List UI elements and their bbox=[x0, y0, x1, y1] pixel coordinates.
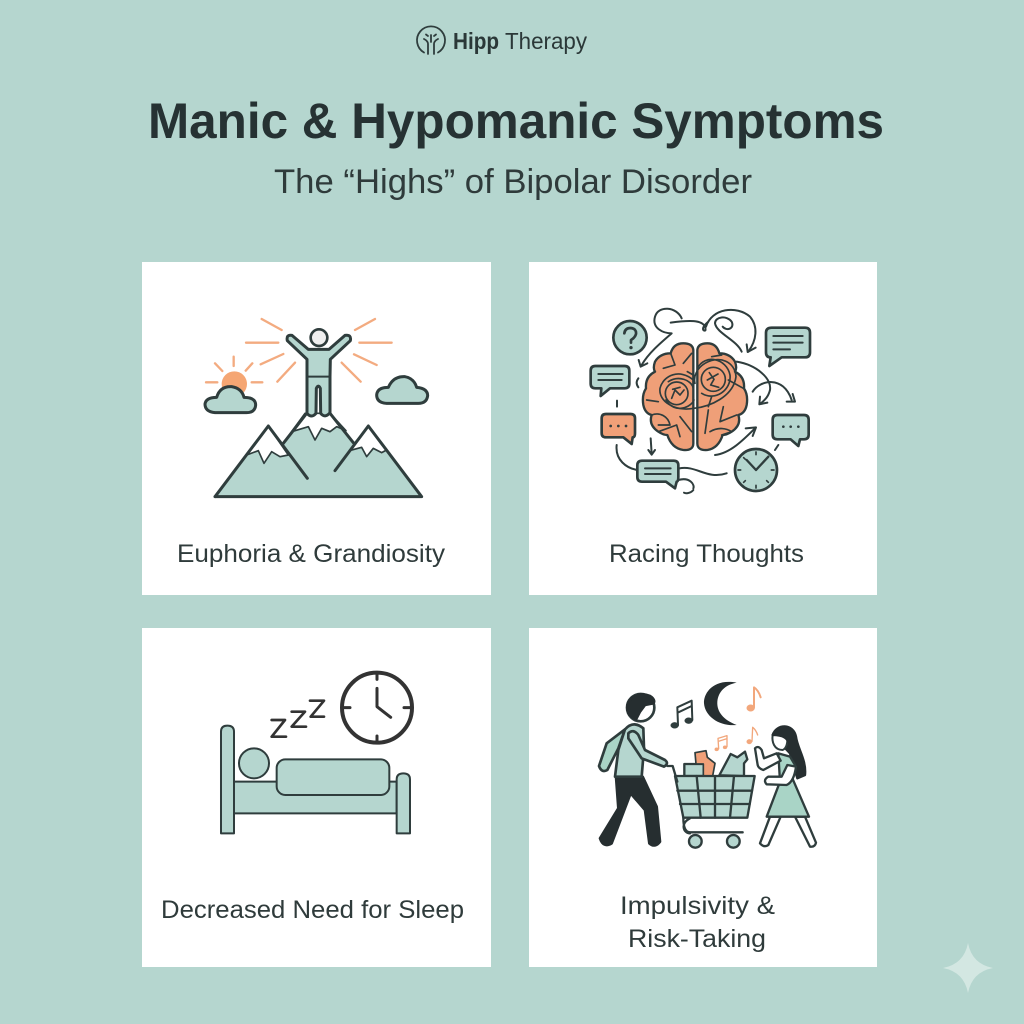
icon: woman bbox=[755, 726, 816, 847]
icon: brain with thought bubbles bbox=[591, 309, 810, 493]
icon: shopping cart bbox=[667, 751, 755, 848]
arrows: swirling thought paths bbox=[617, 309, 795, 493]
icon: question bubble bbox=[613, 321, 647, 354]
icon: right cloud bbox=[377, 377, 428, 403]
icon: person bbox=[287, 329, 351, 416]
title: Manic & Hypomanic Symptoms bbox=[148, 93, 884, 149]
icon: person on mountain peak bbox=[205, 319, 428, 497]
logo wordmark: Hipp bbox=[453, 28, 499, 54]
icon: speech bubble left bbox=[591, 366, 629, 396]
icon: speech bubble right bbox=[773, 415, 809, 446]
label: Racing Thoughts bbox=[609, 540, 804, 568]
label: Decreased Need for Sleep bbox=[161, 896, 464, 924]
logo wordmark: Therapy bbox=[505, 28, 587, 54]
panel: impulsivity and risk-taking bbox=[529, 628, 877, 967]
icon: logo mark bbox=[417, 26, 445, 54]
icon: mountains bbox=[215, 413, 422, 497]
panel: racing thoughts bbox=[529, 262, 877, 595]
icon: man bbox=[599, 694, 667, 845]
icon: speech bubble top right bbox=[766, 328, 810, 366]
icon: sparkle bbox=[943, 943, 993, 993]
icon: radiating rays bbox=[246, 319, 392, 382]
panel: euphoria and grandiosity bbox=[142, 262, 491, 595]
label: first line: Impulsivity & bbox=[620, 892, 775, 920]
label: Euphoria & Grandiosity bbox=[177, 540, 446, 568]
icon: crescent moon bbox=[704, 682, 737, 725]
icon: speech bubble bottom bbox=[637, 461, 678, 488]
icon: shopping scene bbox=[599, 682, 816, 848]
label: second line: Risk-Taking bbox=[628, 925, 766, 953]
icon: bed frame bbox=[221, 726, 410, 833]
icon: wall clock bbox=[342, 673, 412, 743]
icon: orange speech bubble bbox=[602, 414, 635, 444]
subtitle: The “Highs” of Bipolar Disorder bbox=[274, 163, 752, 201]
icon: blanket bbox=[277, 759, 389, 795]
icon: sleeper head bbox=[239, 748, 269, 778]
icon: zzz bbox=[272, 701, 324, 737]
icon: sun bbox=[206, 357, 262, 397]
icon: left cloud bbox=[205, 387, 256, 413]
icon: brain bbox=[643, 343, 747, 450]
icon: clock bbox=[735, 449, 777, 491]
logo: Hipp Therapy bbox=[417, 26, 587, 54]
icon: music notes bbox=[671, 687, 761, 751]
panel: decreased need for sleep bbox=[142, 628, 491, 967]
icon: bed, sleeper, clock bbox=[221, 673, 412, 833]
